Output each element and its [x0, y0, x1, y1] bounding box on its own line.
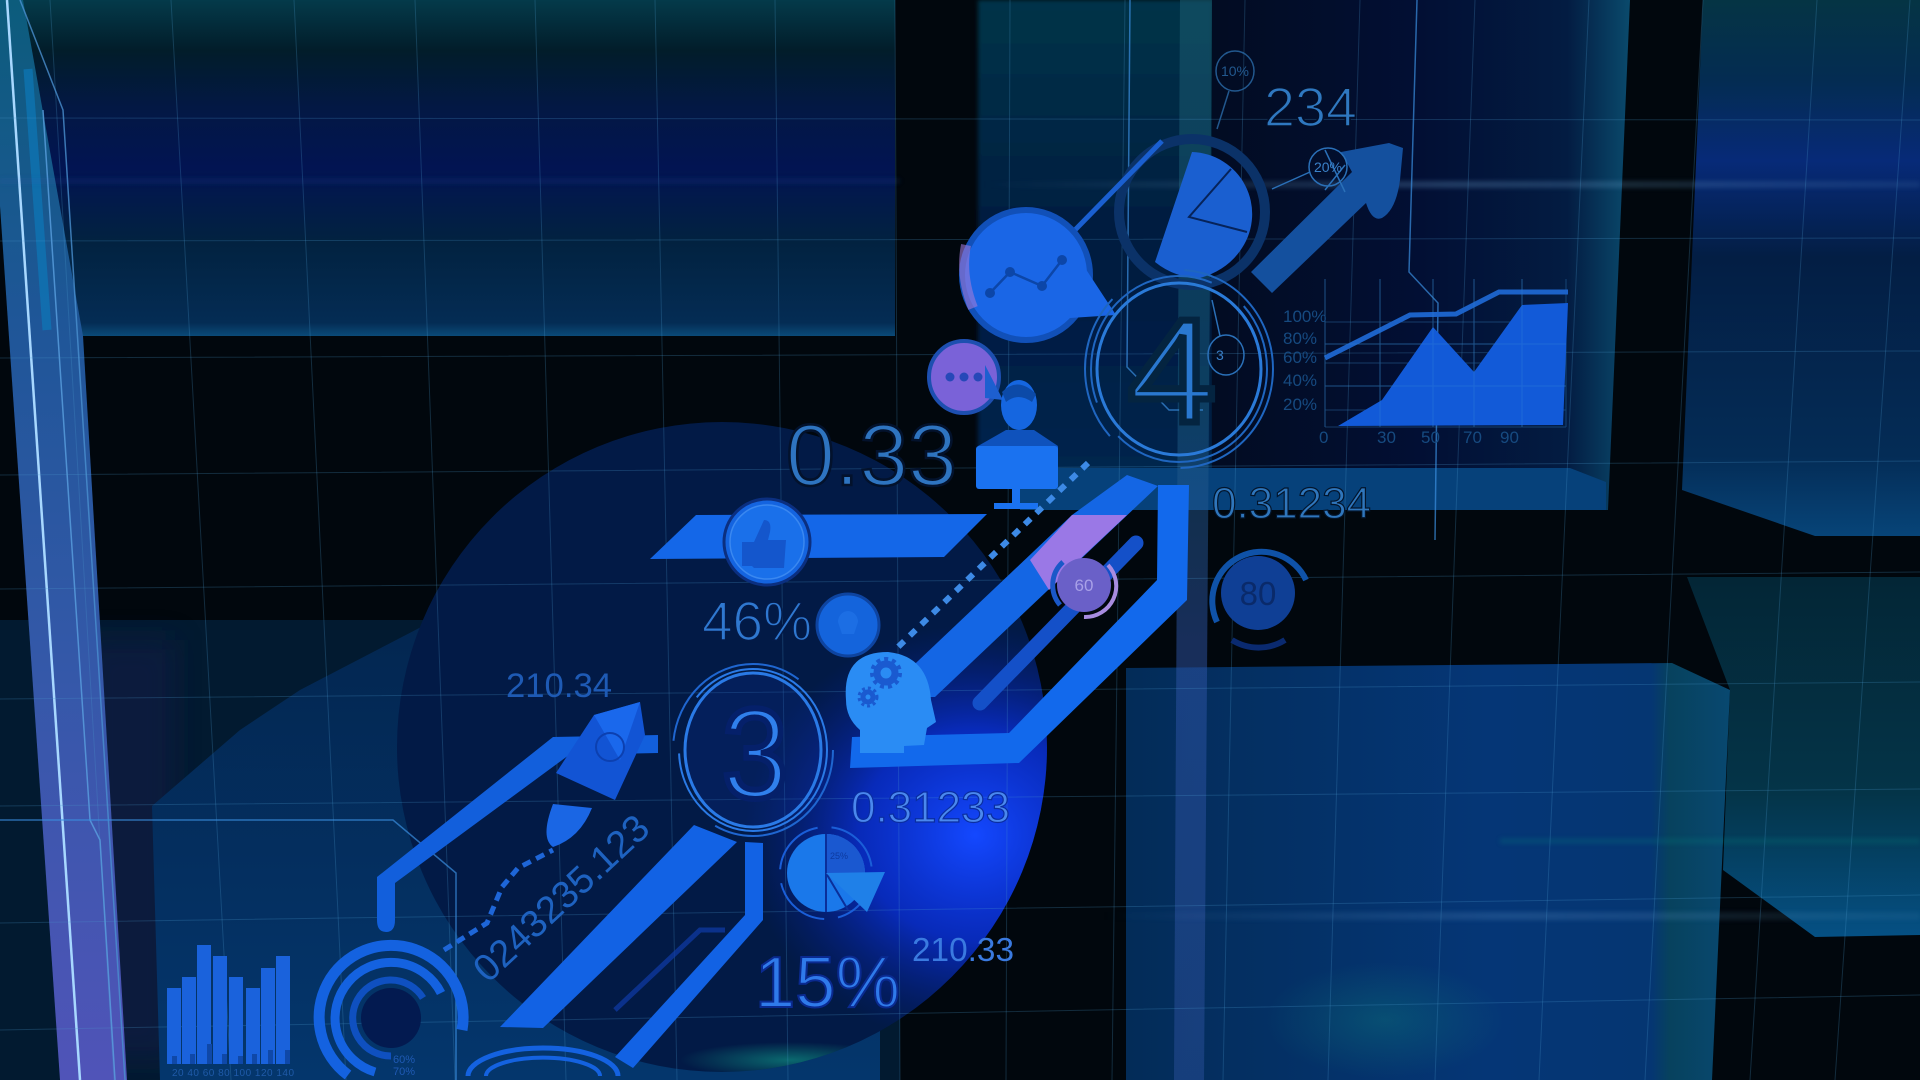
panel: lower-left dark purple tint	[85, 640, 175, 1060]
icon: light bulb circle	[817, 594, 879, 656]
area chart: 40%	[1283, 371, 1317, 390]
number: 46%: 46%	[702, 590, 812, 652]
panel: left strip	[0, 0, 127, 1080]
icon: small pie chart with badge: 25%	[830, 851, 848, 861]
badge: step 3	[673, 664, 833, 836]
icon: pie chart ring	[1119, 139, 1265, 285]
shape: right strip	[615, 842, 763, 1068]
horizontal light streaks	[0, 178, 1920, 920]
connector: band right and base	[850, 485, 1189, 768]
panel: right lower block	[1687, 577, 1920, 937]
number: 234: 234	[1264, 76, 1357, 138]
icon: concentric ring gauge: 60%	[393, 1054, 415, 1066]
area chart: 100%	[1283, 307, 1326, 326]
area chart: 60%	[1283, 348, 1317, 367]
bar chart: 20 40 60 80 100 120 140	[172, 1068, 294, 1079]
number: 15%: 15%	[755, 943, 900, 1023]
callout: 10%	[1216, 51, 1254, 129]
light vertical band	[1174, 0, 1212, 1080]
badge: step 3: 3	[722, 683, 788, 826]
badge: step 4: 4	[1128, 289, 1216, 454]
highlight: pink region	[1030, 515, 1127, 590]
shape: faint inner strip	[615, 930, 725, 1010]
number: 210.34: 210.34	[506, 667, 612, 705]
connector: inner pill	[980, 543, 1136, 703]
area chart: 0	[1319, 428, 1328, 447]
area chart	[1283, 279, 1568, 447]
number: 210.33: 210.33	[912, 931, 1014, 968]
area chart: 70	[1463, 428, 1482, 447]
icon: person at computer	[976, 380, 1058, 509]
icon: rocket	[546, 702, 645, 847]
number: rotated 0243235.123: 0243235.123	[465, 807, 658, 991]
badge: step 4: 3	[1216, 347, 1224, 363]
area chart: 90	[1500, 428, 1519, 447]
badge: step 4	[1085, 270, 1273, 468]
green glow	[1265, 962, 1505, 1078]
connector line	[1074, 141, 1162, 231]
gauge: 60: 60	[1075, 576, 1093, 595]
icon: bottom ring gauge	[468, 1048, 618, 1076]
area chart: 20%	[1283, 395, 1317, 414]
panel: far right block	[1682, 0, 1920, 536]
icon: small speech bubble	[929, 341, 1003, 413]
gauge: 80: 80	[1240, 575, 1276, 612]
icon: trend arrow	[1251, 143, 1403, 293]
panel: screen shelf	[1020, 468, 1606, 510]
icon: speech bubble with line chart	[962, 210, 1116, 340]
dashed trail	[444, 850, 553, 950]
panel: top-left screen block	[20, 0, 895, 336]
icon: small pie chart with badge	[780, 827, 885, 919]
circuit outlines	[0, 0, 1438, 1080]
number: 0.31233: 0.31233	[851, 783, 1010, 832]
connector: band top right	[880, 475, 1158, 697]
gauge: 60	[1053, 558, 1116, 617]
callout: 10%: 10%	[1221, 63, 1249, 79]
icon: concentric ring gauge: 70%	[393, 1066, 415, 1078]
area chart: 30	[1377, 428, 1396, 447]
panel: top centre column	[978, 0, 1213, 480]
dotted link	[895, 463, 1088, 650]
bar chart	[167, 945, 294, 1079]
icon: thumbs up	[724, 499, 810, 585]
number: 0.33: 0.33	[786, 407, 957, 504]
panel: large circle	[397, 422, 1047, 1072]
area chart: 80%	[1283, 329, 1317, 348]
number: 0.31234: 0.31234	[1212, 479, 1371, 528]
blue glow	[692, 638, 1047, 1072]
icon: concentric ring gauge	[319, 945, 463, 1078]
callout: 20%	[1272, 148, 1347, 192]
connector: rocket path	[377, 735, 658, 932]
shape: thumbs bar	[650, 514, 987, 559]
panel: mid-left dark tint	[0, 620, 900, 1080]
panel: lower right block	[1126, 663, 1730, 1080]
panel: top right screen	[1212, 0, 1630, 510]
callout: 20%: 20%	[1314, 159, 1342, 175]
area chart: 50	[1421, 428, 1440, 447]
icon: head with gears	[846, 652, 936, 753]
gauge: 80	[1212, 552, 1306, 648]
shape: big parallelogram	[500, 825, 737, 1028]
panel: lower-left perspective block	[152, 612, 880, 1080]
